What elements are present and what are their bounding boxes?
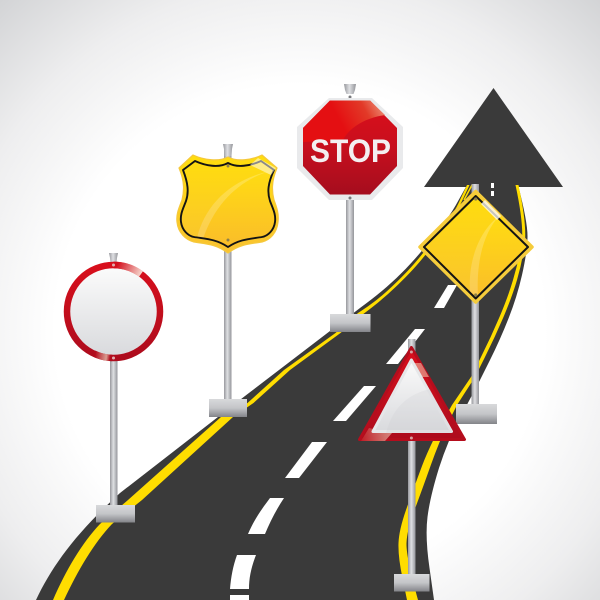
white interior (373, 360, 452, 432)
diamond plate (420, 192, 532, 302)
sign: yellow diamond (420, 184, 532, 424)
inner black outline (424, 196, 528, 298)
sign: round prohibition (67, 253, 160, 522)
face (70, 268, 158, 356)
cap (344, 84, 356, 94)
red octagon (303, 100, 397, 194)
base (96, 505, 135, 522)
base (456, 404, 497, 424)
ring highlight bottom (94, 354, 112, 358)
cap (223, 144, 233, 156)
pole (472, 184, 479, 406)
gloss (470, 215, 527, 298)
sign: stop (297, 84, 403, 332)
road surface (36, 185, 528, 600)
arrow head (424, 88, 563, 187)
gloss (303, 100, 385, 142)
corner shine (250, 158, 276, 175)
red ring (67, 265, 160, 358)
interior gloss (386, 389, 453, 433)
sign: warning triangle (360, 339, 464, 592)
red triangle (360, 348, 464, 440)
edge highlight right (414, 363, 429, 377)
left yellow line (53, 185, 470, 600)
second thin yellow line (464, 185, 472, 200)
base (330, 314, 370, 332)
gloss streak (470, 215, 500, 297)
inner black outline (181, 161, 275, 247)
base (394, 574, 430, 592)
road with arrow head (36, 88, 563, 600)
pole (408, 339, 416, 575)
white octagon (297, 98, 403, 200)
centre dashes (230, 183, 494, 600)
stop text: STOP (310, 133, 391, 169)
edge shine (481, 200, 501, 220)
base (209, 399, 247, 417)
corner highlight left (361, 428, 392, 441)
gloss streak (197, 171, 270, 239)
sign: yellow shield (177, 144, 278, 417)
gloss (197, 171, 275, 247)
shield plate (177, 155, 278, 253)
pole (110, 358, 118, 506)
pole (224, 150, 232, 400)
cap (109, 253, 118, 263)
right yellow line (398, 185, 525, 600)
ring highlight top (114, 265, 141, 274)
pole (346, 198, 354, 315)
